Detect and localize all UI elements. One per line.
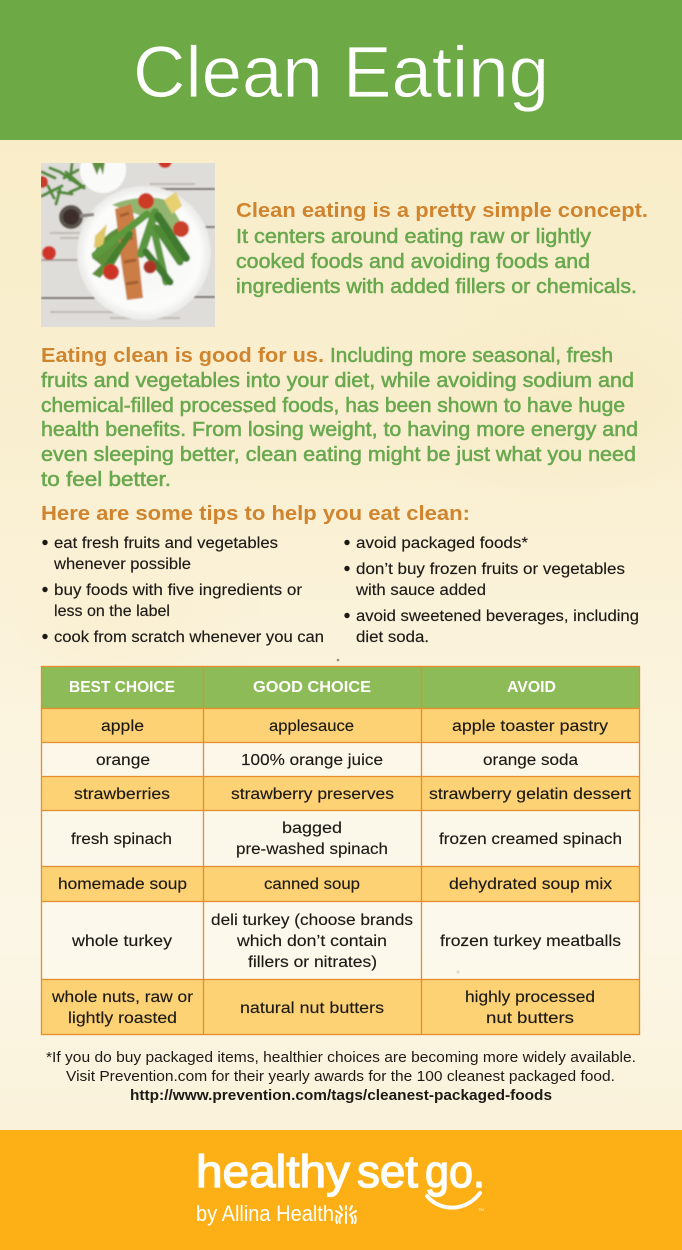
row: nuts: natural nut butters	[240, 1000, 384, 1017]
icon: Allina Health mark	[336, 1206, 356, 1223]
tips list: right column: diet soda.	[356, 629, 429, 646]
title: Clean Eating	[133, 33, 549, 113]
logo wordmark	[196, 1146, 485, 1197]
row: nuts: highly processed	[465, 989, 595, 1006]
row: apple: apple	[101, 718, 144, 735]
intro text block: cooked foods and avoiding foods and	[236, 250, 590, 273]
row: turkey: whole turkey	[71, 933, 172, 950]
row: apple: applesauce	[269, 718, 354, 735]
tips list: right column: with sauce added	[355, 582, 486, 599]
tips list: left column: eat fresh fruits and vegetables	[54, 535, 278, 552]
row: orange: orange	[96, 752, 150, 769]
tips list: right column: don’t buy frozen fruits or vegetables	[356, 561, 625, 578]
parchment background	[0, 140, 682, 1130]
tips list: left column: less on the label	[54, 603, 170, 620]
table header row: GOOD CHOICE	[253, 679, 371, 696]
benefits paragraph	[41, 344, 638, 491]
benefits paragraph: chemical-filled processed foods, has been shown to have huge	[41, 394, 625, 417]
row: turkey: frozen turkey meatballs	[440, 933, 621, 950]
footnote: *If you do buy packaged items, healthier choices are becoming more widely available.	[46, 1050, 636, 1066]
row: nuts: lightly roasted	[68, 1010, 177, 1027]
footnote: Visit Prevention.com for their yearly awards for the 100 cleanest packaged food.	[66, 1069, 615, 1085]
table header row	[41, 666, 640, 708]
intro text block: ingredients with added fillers or chemicals.	[236, 275, 637, 298]
intro text block	[236, 199, 648, 298]
intro text block: Clean eating is a pretty simple concept.	[236, 199, 648, 222]
tips list: right column: avoid sweetened beverages, including	[356, 608, 639, 625]
row shading	[41, 708, 640, 1034]
row: strawberries: strawberry gelatin dessert	[429, 786, 632, 803]
row: soup: homemade soup	[58, 876, 187, 893]
tips list: right column: avoid packaged foods*	[356, 535, 528, 552]
row: spinach: frozen creamed spinach	[439, 831, 622, 848]
tips list: left column: cook from scratch whenever you can	[54, 629, 324, 646]
logo smile	[427, 1193, 480, 1208]
row: spinach	[71, 820, 622, 858]
tips list: left column: whenever possible	[53, 556, 191, 573]
row: orange: 100% orange juice	[241, 752, 383, 769]
benefits paragraph: fruits and vegetables into your diet, while avoiding sodium and	[41, 369, 634, 392]
intro text block: It centers around eating raw or lightly	[236, 225, 592, 248]
food choices table	[41, 666, 640, 1034]
row: soup	[58, 876, 612, 893]
benefits paragraph: Eating clean is good for us.	[41, 344, 324, 367]
food photo: salmon and asparagus on a plate	[41, 163, 215, 327]
row: nuts: whole nuts, raw or	[51, 989, 194, 1006]
row: turkey	[71, 912, 621, 971]
row: strawberries: strawberries	[74, 786, 170, 803]
tips list: left column: buy foods with five ingredients or	[54, 582, 303, 599]
row: orange	[96, 752, 578, 769]
row: apple: apple toaster pastry	[452, 718, 608, 735]
benefits paragraph: health benefits. From losing weight, to having more energy and	[41, 418, 638, 441]
footnote: http://www.prevention.com/tags/cleanest-packaged-foods	[130, 1088, 552, 1104]
logo wordmark: set	[357, 1146, 419, 1197]
row: orange: orange soda	[483, 752, 578, 769]
benefits paragraph: even sleeping better, clean eating might be just what you need	[41, 443, 636, 466]
header band	[0, 0, 682, 140]
row: spinach: bagged	[282, 820, 342, 837]
logo byline: by Allina Health	[196, 1201, 334, 1226]
row: strawberries: strawberry preserves	[231, 786, 394, 803]
row: turkey: which don’t contain	[236, 933, 387, 950]
row: nuts	[51, 989, 595, 1027]
row: turkey: fillers or nitrates)	[248, 954, 377, 971]
row: strawberries	[74, 786, 632, 803]
row: turkey: deli turkey (choose brands	[211, 912, 413, 929]
table header row: BEST CHOICE	[69, 679, 175, 696]
tips list: left column	[42, 535, 324, 646]
row: spinach: fresh spinach	[71, 831, 172, 848]
logo wordmark: go.	[425, 1146, 485, 1197]
footer band with logo	[0, 1130, 682, 1250]
row: soup: dehydrated soup mix	[449, 876, 612, 893]
trademark: TM	[478, 1207, 484, 1212]
logo wordmark: healthy	[196, 1146, 351, 1197]
benefits paragraph: to feel better.	[41, 468, 171, 491]
benefits paragraph: Including more seasonal, fresh	[330, 344, 613, 367]
row: spinach: pre-washed spinach	[236, 841, 388, 858]
table header row: AVOID	[507, 679, 556, 696]
footnote	[46, 1050, 636, 1104]
row: soup: canned soup	[264, 876, 360, 893]
tips heading: Here are some tips to help you eat clean:	[41, 502, 470, 525]
row: apple	[101, 718, 608, 735]
row: nuts: nut butters	[486, 1010, 574, 1027]
tips list: right column	[344, 535, 639, 646]
